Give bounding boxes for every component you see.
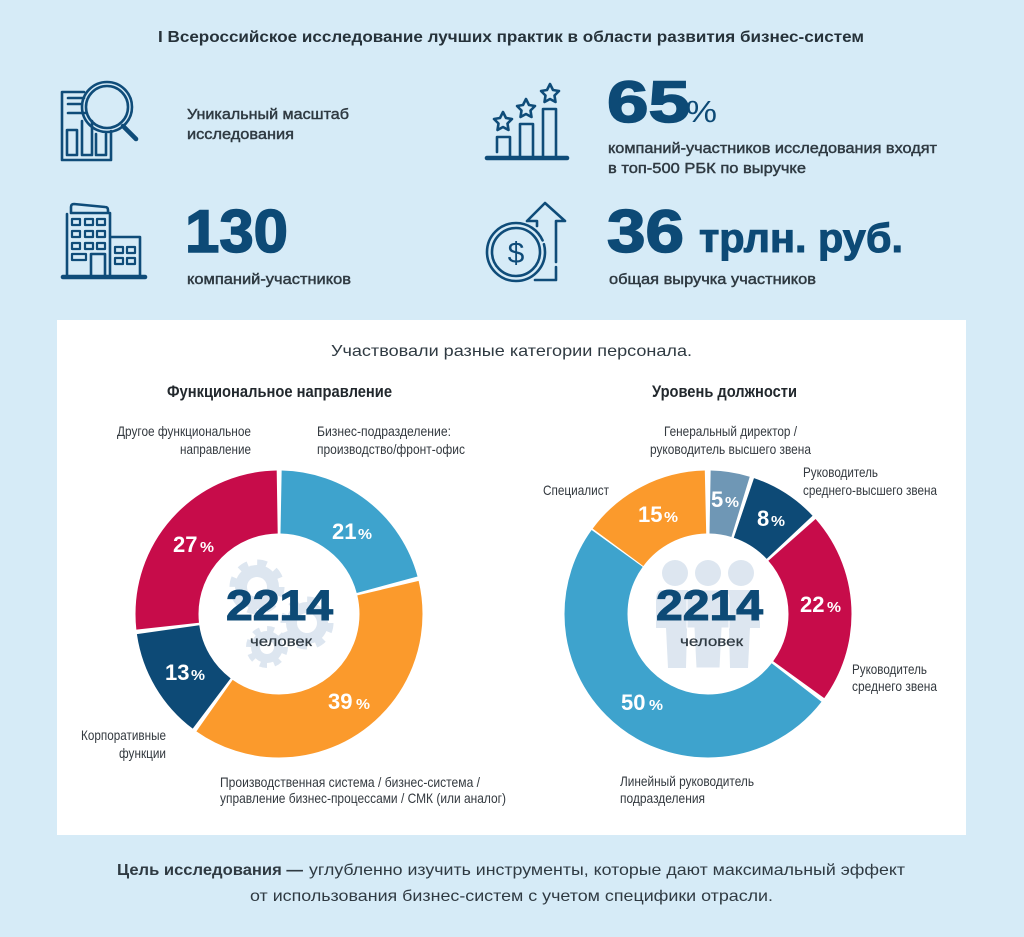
donut chart: functional direction (167, 502, 391, 726)
text: 65 percent description: компаний-участников исследования входят (608, 140, 937, 157)
icon: rising bars with stars (487, 84, 567, 158)
donut chart: position level (596, 502, 820, 726)
value labels: left donut: % (356, 696, 370, 713)
icon: dollar coin with arrow (487, 203, 565, 281)
stat: 65 percent: 65 (607, 70, 690, 135)
value labels: left donut: 39 (328, 689, 352, 714)
labels: left donut: Производственная система / бизнес-система / (220, 774, 480, 790)
value labels: right donut: % (664, 509, 678, 526)
icon: gears (233, 563, 330, 665)
stat: 36 trillion rubles: 36 (607, 198, 684, 265)
text: research goal (117, 862, 906, 905)
center total: left donut (226, 582, 333, 649)
center total: left donut: 2214 (226, 582, 333, 630)
panel heading: Участвовали разные категории персонала. (331, 343, 692, 360)
labels: right donut: Руководитель (852, 661, 927, 677)
labels: right donut: Генеральный директор / (664, 423, 797, 439)
labels: right donut: Специалист (543, 482, 609, 498)
value labels: right donut: % (725, 494, 739, 511)
labels: left donut: управление бизнес-процессами / СМК (или аналог) (220, 790, 506, 806)
value labels: left donut: 21 (332, 519, 356, 544)
labels: right donut: Руководитель (803, 464, 878, 480)
stat: 130 companies: 130 (185, 198, 288, 265)
panel: personnel categories (57, 320, 966, 835)
value labels: right donut: 15 (638, 502, 662, 527)
labels: left donut: Корпоративные (81, 727, 166, 743)
text: 36 trillion description: общая выручка участников (609, 271, 816, 288)
center total: right donut: 2214 (656, 582, 763, 630)
labels: left donut: Другое функциональное (117, 423, 251, 439)
value labels: right donut: % (827, 599, 841, 616)
title: I Всероссийское исследование лучших практик в области развития бизнес-систем (158, 29, 864, 46)
value labels: right donut: 22 (800, 592, 824, 617)
text: 130 description: компаний-участников (187, 271, 351, 288)
labels: right donut: руководитель высшего звена (650, 441, 811, 457)
value labels: left donut: % (200, 539, 214, 556)
stat: 65 percent (607, 70, 717, 135)
text: 65 percent description: в топ-500 РБК по выручке (608, 160, 806, 177)
text: research goal: углубленно изучить инструменты, которые дают максимальный эффект (309, 862, 906, 879)
labels: right donut: среднего-высшего звена (803, 482, 937, 498)
center total: left donut: человек (250, 633, 313, 649)
text: unique scale: Уникальный масштаб (187, 106, 349, 123)
value labels: left donut: % (191, 667, 205, 684)
stat: 36 trillion rubles: трлн. руб. (699, 215, 903, 261)
value labels: right donut: 5 (711, 487, 723, 512)
center total: right donut (656, 582, 763, 649)
icon: magnifier over chart (62, 82, 136, 160)
icon: people (656, 560, 760, 668)
value labels: left donut: 13 (165, 660, 189, 685)
text: 65 percent description (608, 140, 937, 177)
labels: right donut: среднего звена (852, 678, 937, 694)
value labels: right donut: 50 (621, 690, 645, 715)
labels: left donut: Бизнес-подразделение: (317, 423, 451, 439)
labels: left donut: производство/фронт-офис (317, 441, 465, 457)
value labels: right donut (621, 487, 841, 715)
icon: dollar coin with arrow: $ (508, 237, 525, 270)
stat: 65 percent: % (686, 94, 717, 129)
value labels: left donut (165, 519, 372, 714)
labels: right donut: подразделения (620, 790, 705, 806)
labels: left donut: направление (180, 441, 251, 457)
icon: office building (63, 204, 145, 277)
value labels: right donut: % (771, 513, 785, 530)
stat: 36 trillion rubles (607, 198, 903, 265)
value labels: left donut: 27 (173, 532, 197, 557)
text: research goal: Цель исследования — (117, 862, 303, 879)
text: unique scale: исследования (187, 126, 294, 143)
labels: right donut (543, 423, 937, 806)
heading: functional direction: Функциональное направление (167, 382, 392, 401)
labels: right donut: Линейный руководитель (620, 773, 754, 789)
center total: right donut: человек (680, 633, 744, 649)
labels: left donut (81, 423, 506, 806)
value labels: right donut: % (649, 697, 663, 714)
value labels: right donut: 8 (757, 506, 769, 531)
heading: position level: Уровень должности (652, 382, 797, 401)
text: research goal: от использования бизнес-систем с учетом специфики отрасли. (250, 888, 773, 905)
labels: left donut: функции (119, 745, 166, 761)
value labels: left donut: % (358, 526, 372, 543)
text: unique scale (187, 106, 349, 143)
